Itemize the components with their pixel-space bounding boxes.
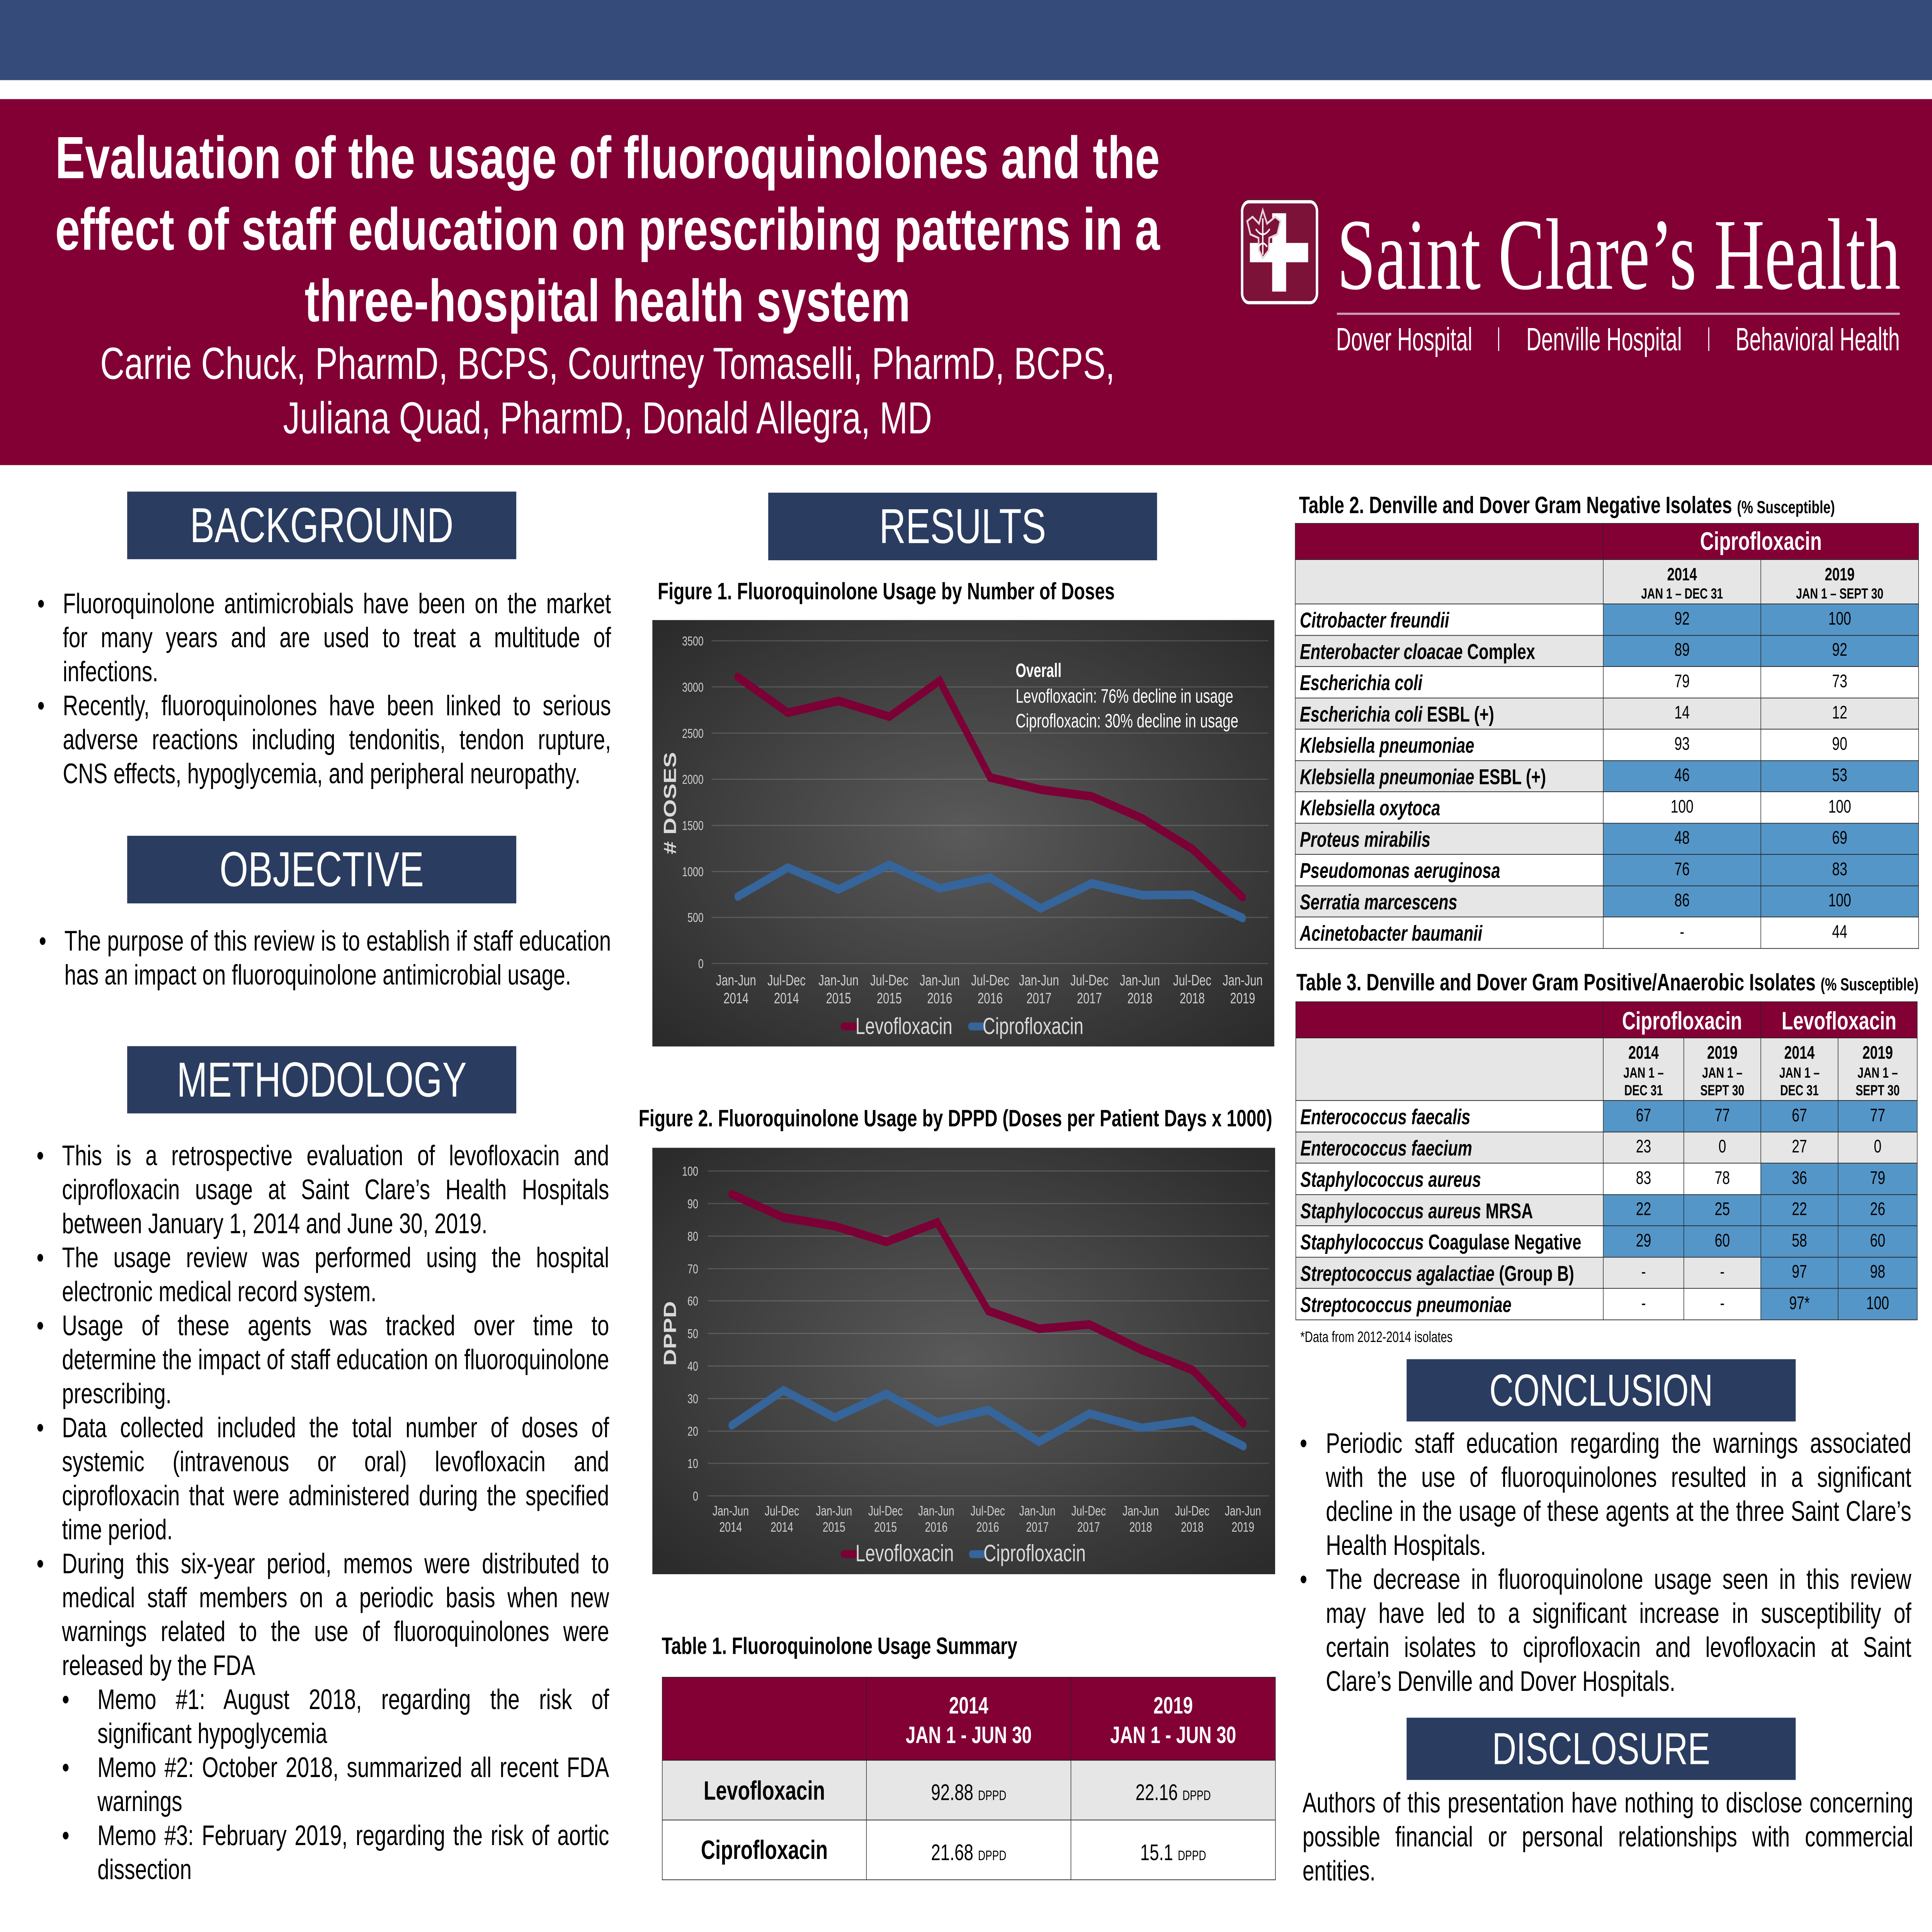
- table 3: gram positive and anaerobic isolates: Streptococcus agalactiae (Group B): [1300, 1261, 1574, 1285]
- table 3: gram positive and anaerobic isolates: 77: [1715, 1105, 1730, 1125]
- table 2: gram negative isolates: JAN 1 – SEPT 30: [1796, 585, 1883, 602]
- y axis ticks: 1000: [682, 865, 704, 879]
- text: •: [37, 587, 45, 619]
- background text: [41, 587, 611, 790]
- y axis ticks: 90: [687, 1197, 698, 1211]
- table 2: gram negative isolates: Klebsiella pneumoniae ESBL (+): [1300, 765, 1546, 789]
- table 2: gram negative isolates: Pseudomonas aeruginosa: [1300, 859, 1500, 883]
- y axis ticks: 500: [687, 911, 704, 925]
- icon: cross emblem: [1240, 197, 1319, 306]
- table 2: gram negative isolates: 89: [1674, 639, 1690, 660]
- figure 2 caption: Figure 2. Fluoroquinolone Usage by DPPD (Doses per Patient Days x 1000): [639, 1105, 1272, 1132]
- x axis labels: Jul-Dec: [1070, 972, 1109, 989]
- chart: figure 2 DPPD: [652, 1148, 1275, 1574]
- table 1: usage summary: JAN 1 - JUN 30: [1110, 1722, 1236, 1748]
- heading: disclosure: DISCLOSURE: [1492, 1724, 1710, 1774]
- conclusion text: decline in the usage of these agents at the three Saint Clare’s: [1326, 1495, 1912, 1527]
- x axis labels: 2014: [719, 1519, 742, 1535]
- table 1: usage summary: 2014: [949, 1692, 988, 1718]
- heading: background: [127, 492, 516, 559]
- authors: Juliana Quad, PharmD, Donald Allegra, MD: [283, 393, 932, 443]
- table 3: gram positive and anaerobic isolates: 0: [1874, 1136, 1881, 1156]
- annotation: overall decline: Levofloxacin: 76% decline in usage: [1015, 685, 1233, 707]
- table 2: gram negative isolates: 69: [1832, 827, 1847, 848]
- table 1: usage summary: 2019: [1153, 1692, 1193, 1718]
- title: effect of staff education on prescribing patterns in a: [55, 196, 1160, 263]
- conclusion text: may have led to a significant increase in susceptibility of: [1326, 1597, 1912, 1629]
- x axis labels: Jul-Dec: [870, 972, 908, 989]
- x axis labels: Jan-Jun: [713, 1503, 749, 1519]
- text: •: [36, 1412, 44, 1443]
- x axis labels: 2015: [823, 1519, 845, 1535]
- table 3: gram positive and anaerobic isolates: 100: [1866, 1293, 1889, 1313]
- objective text: The purpose of this review is to establish if staff education: [65, 925, 611, 957]
- methodology text: During this six-year period, memos were distributed to: [62, 1548, 609, 1579]
- table 3: gram positive and anaerobic isolates: 60: [1870, 1230, 1885, 1250]
- methodology text: dissection: [97, 1853, 192, 1885]
- table 3: gram positive and anaerobic isolates: 78: [1715, 1167, 1730, 1188]
- annotation: overall decline: Ciprofloxacin: 30% decline in usage: [1015, 710, 1238, 732]
- disclosure text: Authors of this presentation have nothing to disclose concerning: [1303, 1787, 1913, 1818]
- y axis ticks: 0: [693, 1489, 698, 1503]
- table 3: gram positive and anaerobic isolates: 83: [1636, 1167, 1651, 1188]
- header band: [0, 99, 1932, 465]
- table 1: usage summary: 15.1 DPPD: [1140, 1840, 1206, 1865]
- table 2: gram negative isolates: 2014: [1667, 564, 1697, 584]
- y axis ticks: 10: [687, 1457, 698, 1471]
- heading: objective: [127, 836, 516, 903]
- x axis labels: Jan-Jun: [1120, 972, 1160, 989]
- table 3: gram positive and anaerobic isolates: Levofloxacin: [1782, 1007, 1896, 1034]
- heading: conclusion: [1406, 1359, 1796, 1422]
- table 3: gram positive and anaerobic isolates: Ciprofloxacin: [1622, 1007, 1742, 1034]
- table 1: usage summary: [662, 1677, 1276, 1880]
- y axis ticks: [682, 1164, 698, 1503]
- table 2: gram negative isolates: [1295, 523, 1919, 949]
- title: [0, 122, 1215, 337]
- y axis ticks: 3000: [682, 680, 704, 695]
- x axis labels: Jul-Dec: [1071, 1503, 1106, 1519]
- background text: Recently, fluoroquinolones have been linked to serious: [63, 689, 611, 721]
- x axis labels: 2017: [1077, 990, 1102, 1007]
- title: Evaluation of the usage of fluoroquinolones and the: [55, 124, 1160, 191]
- x axis labels: 2015: [874, 1519, 897, 1535]
- x axis labels: 2016: [976, 1519, 999, 1535]
- conclusion text: with the use of fluoroquinolones resulted in a significant: [1326, 1461, 1912, 1493]
- heading: objective: OBJECTIVE: [219, 842, 424, 897]
- methodology text: warnings: [97, 1785, 182, 1817]
- table 3 caption: Table 3. Denville and Dover Gram Positive/Anaerobic Isolates (% Susceptible): [1296, 969, 1918, 996]
- table 3: gram positive and anaerobic isolates: Streptococcus pneumoniae: [1300, 1293, 1512, 1316]
- table 1: usage summary: JAN 1 - JUN 30: [906, 1722, 1032, 1748]
- table 1: usage summary: 21.68 DPPD: [931, 1840, 1006, 1865]
- table 3 footnote: *Data from 2012-2014 isolates: [1300, 1328, 1452, 1345]
- x axis labels: Jul-Dec: [1175, 1503, 1209, 1519]
- methodology text: The usage review was performed using the hospital: [62, 1242, 609, 1273]
- table 2: gram negative isolates: 92: [1832, 639, 1847, 660]
- x axis labels: 2016: [978, 990, 1003, 1007]
- y axis ticks: 3500: [682, 634, 704, 648]
- table 2: gram negative isolates: 83: [1832, 859, 1847, 879]
- x axis labels: 2019: [1230, 990, 1255, 1007]
- table 2: gram negative isolates: 76: [1674, 859, 1690, 879]
- table 2: gram negative isolates: 53: [1832, 765, 1847, 785]
- methodology text: between January 1, 2014 and June 30, 2019.: [62, 1208, 488, 1239]
- text: •: [36, 1139, 44, 1171]
- x axis labels: Jul-Dec: [765, 1503, 799, 1519]
- x axis labels: 2017: [1026, 990, 1051, 1007]
- table 2: gram negative isolates: -: [1680, 921, 1684, 942]
- objective text: [41, 924, 611, 992]
- table 1: usage summary: 92.88 DPPD: [931, 1780, 1006, 1805]
- methodology text: Memo #1: August 2018, regarding the risk of: [97, 1683, 609, 1715]
- table 3: gram positive and anaerobic isolates: DEC 31: [1780, 1082, 1819, 1099]
- x axis labels: Jan-Jun: [1122, 1503, 1159, 1519]
- table 2: gram negative isolates: 92: [1674, 608, 1690, 628]
- table 2: gram negative isolates: 100: [1828, 796, 1851, 816]
- heading: methodology: METHODOLOGY: [177, 1053, 467, 1107]
- x axis labels: Jan-Jun: [918, 1503, 954, 1519]
- table 3: gram positive and anaerobic isolates: 2019: [1862, 1042, 1893, 1063]
- y axis ticks: [682, 634, 704, 971]
- table 3: gram positive and anaerobic isolates: 97: [1792, 1261, 1807, 1282]
- logo rule: [1337, 313, 1900, 315]
- table 3: gram positive and anaerobic isolates: 67: [1792, 1105, 1807, 1125]
- logo hospital names: Denville Hospital: [1526, 321, 1682, 357]
- table 1: usage summary: 22.16 DPPD: [1136, 1780, 1211, 1805]
- table 3: gram positive and anaerobic isolates: 60: [1715, 1230, 1730, 1250]
- x axis labels: 2015: [826, 990, 851, 1007]
- conclusion text: certain isolates to ciprofloxacin and levofloxacin at Saint: [1326, 1631, 1912, 1663]
- table 2: gram negative isolates: Klebsiella oxytoca: [1300, 796, 1440, 820]
- heading: disclosure: [1406, 1718, 1796, 1780]
- table 2: gram negative isolates: 100: [1828, 890, 1851, 910]
- y axis ticks: 2000: [682, 772, 704, 787]
- table 2: gram negative isolates: 2019: [1825, 564, 1855, 584]
- x axis labels: Jan-Jun: [1019, 972, 1059, 989]
- methodology text: determine the impact of staff education on fluoroquinolone: [62, 1344, 609, 1375]
- table 3: gram positive and anaerobic isolates: 2014: [1628, 1042, 1659, 1063]
- table 3: gram positive and anaerobic isolates: 26: [1870, 1199, 1885, 1219]
- table 2: gram negative isolates: 46: [1674, 765, 1690, 785]
- table 2: gram negative isolates: 86: [1674, 890, 1690, 910]
- table 3: gram positive and anaerobic isolates: JAN 1 –: [1702, 1065, 1743, 1081]
- table 1: usage summary: Levofloxacin: [704, 1776, 825, 1805]
- table 2: gram negative isolates: Escherichia coli ESBL (+): [1300, 702, 1494, 726]
- heading: conclusion: CONCLUSION: [1489, 1366, 1713, 1415]
- table 2: gram negative isolates: Acinetobacter baumanii: [1300, 921, 1482, 945]
- heading: methodology: [127, 1046, 516, 1113]
- table 3: gram positive and anaerobic isolates: 2019: [1707, 1042, 1738, 1063]
- x axis labels: Jul-Dec: [971, 972, 1009, 989]
- y axis ticks: 20: [687, 1424, 698, 1439]
- x axis labels: [713, 1503, 1261, 1535]
- table 3: gram positive and anaerobic isolates: 79: [1870, 1167, 1885, 1188]
- x axis labels: Jan-Jun: [1225, 1503, 1261, 1519]
- annotation: overall decline: [1015, 660, 1238, 732]
- x axis labels: Jul-Dec: [1173, 972, 1211, 989]
- table 3: gram positive and anaerobic isolates: DEC 31: [1624, 1082, 1663, 1099]
- legend: [844, 1014, 1083, 1039]
- heading: results: RESULTS: [879, 499, 1046, 554]
- x axis labels: 2015: [877, 990, 902, 1007]
- methodology text: This is a retrospective evaluation of levofloxacin and: [62, 1139, 609, 1171]
- y axis ticks: 0: [698, 957, 704, 971]
- methodology text: Data collected included the total number of doses of: [62, 1412, 609, 1443]
- table 2: gram negative isolates: 14: [1674, 702, 1690, 722]
- x axis labels: Jan-Jun: [716, 972, 756, 989]
- table 3: gram positive and anaerobic isolates: 58: [1792, 1230, 1807, 1250]
- ciprofloxacin line: [738, 865, 1243, 918]
- annotation: overall decline: Overall: [1015, 660, 1061, 681]
- table 3: gram positive and anaerobic isolates: Enterococcus faecalis: [1300, 1105, 1470, 1129]
- table 3: gram positive and anaerobic isolates: JAN 1 –: [1623, 1065, 1664, 1081]
- x axis labels: 2018: [1180, 990, 1205, 1007]
- text: •: [1300, 1427, 1307, 1459]
- table 3: gram positive and anaerobic isolates: 98: [1870, 1261, 1885, 1282]
- top blue band: [0, 0, 1932, 80]
- disclosure text: possible financial or personal relationships with commercial: [1303, 1821, 1913, 1852]
- x axis labels: Jan-Jun: [818, 972, 859, 989]
- disclosure text: [1303, 1786, 1913, 1888]
- methodology text: systemic (intravenous or oral) levofloxacin and: [62, 1446, 609, 1477]
- ciprofloxacin line: [732, 1390, 1243, 1446]
- table 2: gram negative isolates: Citrobacter freundii: [1300, 608, 1449, 632]
- methodology text: Memo #2: October 2018, summarized all recent FDA: [97, 1751, 609, 1783]
- table 3: gram positive and anaerobic isolates: -: [1720, 1293, 1725, 1313]
- table 2: gram negative isolates: Escherichia coli: [1300, 671, 1422, 695]
- x axis labels: [716, 972, 1263, 1007]
- logo: Saint Clare's Health: [1234, 193, 1910, 365]
- table 3: gram positive and anaerobic isolates: [1296, 1002, 1917, 1320]
- methodology text: ciprofloxacin usage at Saint Clare’s Health Hospitals: [62, 1173, 609, 1205]
- x axis labels: 2016: [927, 990, 952, 1007]
- legend: Ciprofloxacin: [983, 1540, 1086, 1566]
- x axis labels: 2016: [925, 1519, 947, 1535]
- y axis ticks: 30: [687, 1392, 698, 1406]
- table 3: gram positive and anaerobic isolates: 27: [1792, 1136, 1807, 1156]
- text: •: [37, 689, 45, 721]
- x axis labels: 2018: [1181, 1519, 1204, 1535]
- y axis ticks: 100: [682, 1164, 698, 1179]
- legend: [844, 1540, 1086, 1566]
- x axis labels: 2018: [1128, 990, 1152, 1007]
- table 3: gram positive and anaerobic isolates: Staphylococcus aureus: [1300, 1167, 1481, 1191]
- methodology text: [40, 1138, 609, 1886]
- table 3: gram positive and anaerobic isolates: 77: [1870, 1105, 1885, 1125]
- logo hospital names: [1336, 321, 1900, 357]
- table 1: usage summary: Ciprofloxacin: [701, 1835, 828, 1864]
- table 3: gram positive and anaerobic isolates: 29: [1636, 1230, 1651, 1250]
- methodology text: •: [62, 1683, 70, 1715]
- table 3: gram positive and anaerobic isolates: JAN 1 –: [1857, 1065, 1898, 1081]
- methodology text: significant hypoglycemia: [97, 1717, 327, 1749]
- table 3: gram positive and anaerobic isolates: 23: [1636, 1136, 1651, 1156]
- x axis labels: Jan-Jun: [920, 972, 960, 989]
- y axis ticks: 70: [687, 1262, 698, 1276]
- objective text: •: [39, 925, 46, 957]
- methodology text: medical staff members on a periodic basis when new: [62, 1582, 609, 1613]
- background text: infections.: [63, 655, 158, 687]
- x axis labels: 2014: [770, 1519, 793, 1535]
- x axis labels: Jul-Dec: [767, 972, 806, 989]
- objective text: has an impact on fluoroquinolone antimicrobial usage.: [65, 959, 571, 991]
- table 3: gram positive and anaerobic isolates: Enterococcus faecium: [1300, 1136, 1472, 1160]
- table 3: gram positive and anaerobic isolates: SEPT 30: [1855, 1082, 1900, 1099]
- table 3: gram positive and anaerobic isolates: 67: [1636, 1105, 1651, 1125]
- conclusion text: Periodic staff education regarding the warnings associated: [1326, 1427, 1912, 1459]
- background text: Fluoroquinolone antimicrobials have been on the market: [63, 587, 611, 619]
- legend: Ciprofloxacin: [983, 1014, 1083, 1039]
- authors: Carrie Chuck, PharmD, BCPS, Courtney Tomaselli, PharmD, BCPS,: [100, 338, 1115, 389]
- chart: figure 1 doses: [652, 620, 1274, 1046]
- figure 1 caption: Figure 1. Fluoroquinolone Usage by Number of Doses: [658, 578, 1115, 605]
- x axis labels: 2019: [1231, 1519, 1254, 1535]
- y axis ticks: 80: [687, 1230, 698, 1244]
- table 2: gram negative isolates: JAN 1 – DEC 31: [1641, 585, 1723, 602]
- levofloxacin line: [732, 1194, 1243, 1423]
- x axis labels: Jan-Jun: [1019, 1503, 1056, 1519]
- x axis labels: Jan-Jun: [816, 1503, 852, 1519]
- table 3: gram positive and anaerobic isolates: 97*: [1789, 1293, 1810, 1313]
- methodology text: •: [62, 1751, 70, 1783]
- x axis labels: 2014: [774, 990, 799, 1007]
- table 3: gram positive and anaerobic isolates: -: [1720, 1261, 1725, 1282]
- text: •: [36, 1310, 44, 1341]
- table 3: gram positive and anaerobic isolates: -: [1641, 1293, 1646, 1313]
- conclusion text: The decrease in fluoroquinolone usage seen in this review: [1326, 1563, 1912, 1595]
- table 3: gram positive and anaerobic isolates: SEPT 30: [1700, 1082, 1744, 1099]
- x axis labels: Jan-Jun: [1223, 972, 1263, 989]
- methodology text: •: [62, 1819, 70, 1851]
- methodology text: time period.: [62, 1514, 173, 1545]
- methodology text: Usage of these agents was tracked over time to: [62, 1310, 609, 1341]
- y axis ticks: 60: [687, 1294, 698, 1309]
- table 2: gram negative isolates: 12: [1832, 702, 1847, 722]
- table 3: gram positive and anaerobic isolates: 25: [1715, 1199, 1730, 1219]
- table 2: gram negative isolates: Proteus mirabilis: [1300, 827, 1430, 851]
- methodology text: electronic medical record system.: [62, 1276, 376, 1307]
- x axis labels: Jul-Dec: [868, 1503, 903, 1519]
- y axis title: DPPD: [660, 1301, 680, 1366]
- methodology text: prescribing.: [62, 1378, 172, 1409]
- levofloxacin line: [738, 677, 1243, 897]
- x axis labels: Jul-Dec: [971, 1503, 1005, 1519]
- table 2: gram negative isolates: Enterobacter cloacae Complex: [1300, 639, 1535, 663]
- text: •: [36, 1548, 44, 1579]
- legend: Levofloxacin: [855, 1540, 954, 1566]
- table 2: gram negative isolates: Serratia marcescens: [1300, 890, 1458, 914]
- y axis title: # DOSES: [660, 752, 680, 854]
- title: three-hospital health system: [304, 268, 910, 334]
- table 2 caption: Table 2. Denville and Dover Gram Negative Isolates (% Susceptible): [1299, 492, 1835, 519]
- table 3: gram positive and anaerobic isolates: 22: [1792, 1199, 1807, 1219]
- table 2: gram negative isolates: 44: [1832, 921, 1847, 942]
- table 3: gram positive and anaerobic isolates: 22: [1636, 1199, 1651, 1219]
- y axis ticks: 40: [687, 1359, 698, 1374]
- table 2: gram negative isolates: 48: [1674, 827, 1690, 848]
- table 2: gram negative isolates: Klebsiella pneumoniae: [1300, 733, 1474, 757]
- table 2: gram negative isolates: 93: [1674, 733, 1690, 753]
- table 2: gram negative isolates: 79: [1674, 671, 1690, 691]
- table 3: gram positive and anaerobic isolates: 0: [1718, 1136, 1726, 1156]
- disclosure text: entities.: [1303, 1855, 1376, 1886]
- table 2: gram negative isolates: 73: [1832, 671, 1847, 691]
- text: •: [36, 1242, 44, 1273]
- table 2: gram negative isolates: Ciprofloxacin: [1700, 527, 1822, 556]
- table 3: gram positive and anaerobic isolates: JAN 1 –: [1779, 1065, 1820, 1081]
- background text: adverse reactions including tendonitis, tendon rupture,: [63, 723, 611, 755]
- table 2: gram negative isolates: 100: [1671, 796, 1694, 816]
- conclusion text: Clare’s Denville and Dover Hospitals.: [1326, 1665, 1675, 1697]
- y axis ticks: 2500: [682, 726, 704, 741]
- methodology text: warnings related to the use of fluoroquinolones were: [62, 1616, 609, 1647]
- methodology text: released by the FDA: [62, 1650, 255, 1681]
- logo hospital names: Dover Hospital: [1336, 321, 1472, 357]
- authors: [0, 336, 1215, 445]
- text: •: [1300, 1563, 1307, 1595]
- table 3: gram positive and anaerobic isolates: 36: [1792, 1167, 1807, 1188]
- table 3: gram positive and anaerobic isolates: Staphylococcus Coagulase Negative: [1300, 1230, 1581, 1254]
- conclusion text: [1304, 1426, 1912, 1698]
- table 1 caption: Table 1. Fluoroquinolone Usage Summary: [662, 1633, 1017, 1659]
- heading: background: BACKGROUND: [190, 498, 454, 553]
- x axis labels: 2014: [723, 990, 748, 1007]
- table 2: gram negative isolates: 100: [1828, 608, 1851, 628]
- x axis labels: 2017: [1077, 1519, 1100, 1535]
- y axis ticks: 50: [687, 1327, 698, 1341]
- legend: Levofloxacin: [855, 1014, 952, 1039]
- methodology text: Memo #3: February 2019, regarding the risk of aortic: [97, 1819, 609, 1851]
- y axis ticks: 1500: [682, 819, 704, 833]
- background text: CNS effects, hypoglycemia, and peripheral neuropathy.: [63, 757, 580, 789]
- background text: for many years and are used to treat a multitude of: [63, 621, 611, 653]
- heading: results: [768, 493, 1157, 560]
- methodology text: ciprofloxacin that were administered during the specified: [62, 1480, 609, 1511]
- table 3: gram positive and anaerobic isolates: -: [1641, 1261, 1646, 1282]
- table 3: gram positive and anaerobic isolates: 2014: [1784, 1042, 1815, 1063]
- conclusion text: Health Hospitals.: [1326, 1529, 1486, 1561]
- x axis labels: 2018: [1129, 1519, 1152, 1535]
- table 2: gram negative isolates: 90: [1832, 733, 1847, 753]
- x axis labels: 2017: [1026, 1519, 1049, 1535]
- table 3: gram positive and anaerobic isolates: Staphylococcus aureus MRSA: [1300, 1199, 1533, 1223]
